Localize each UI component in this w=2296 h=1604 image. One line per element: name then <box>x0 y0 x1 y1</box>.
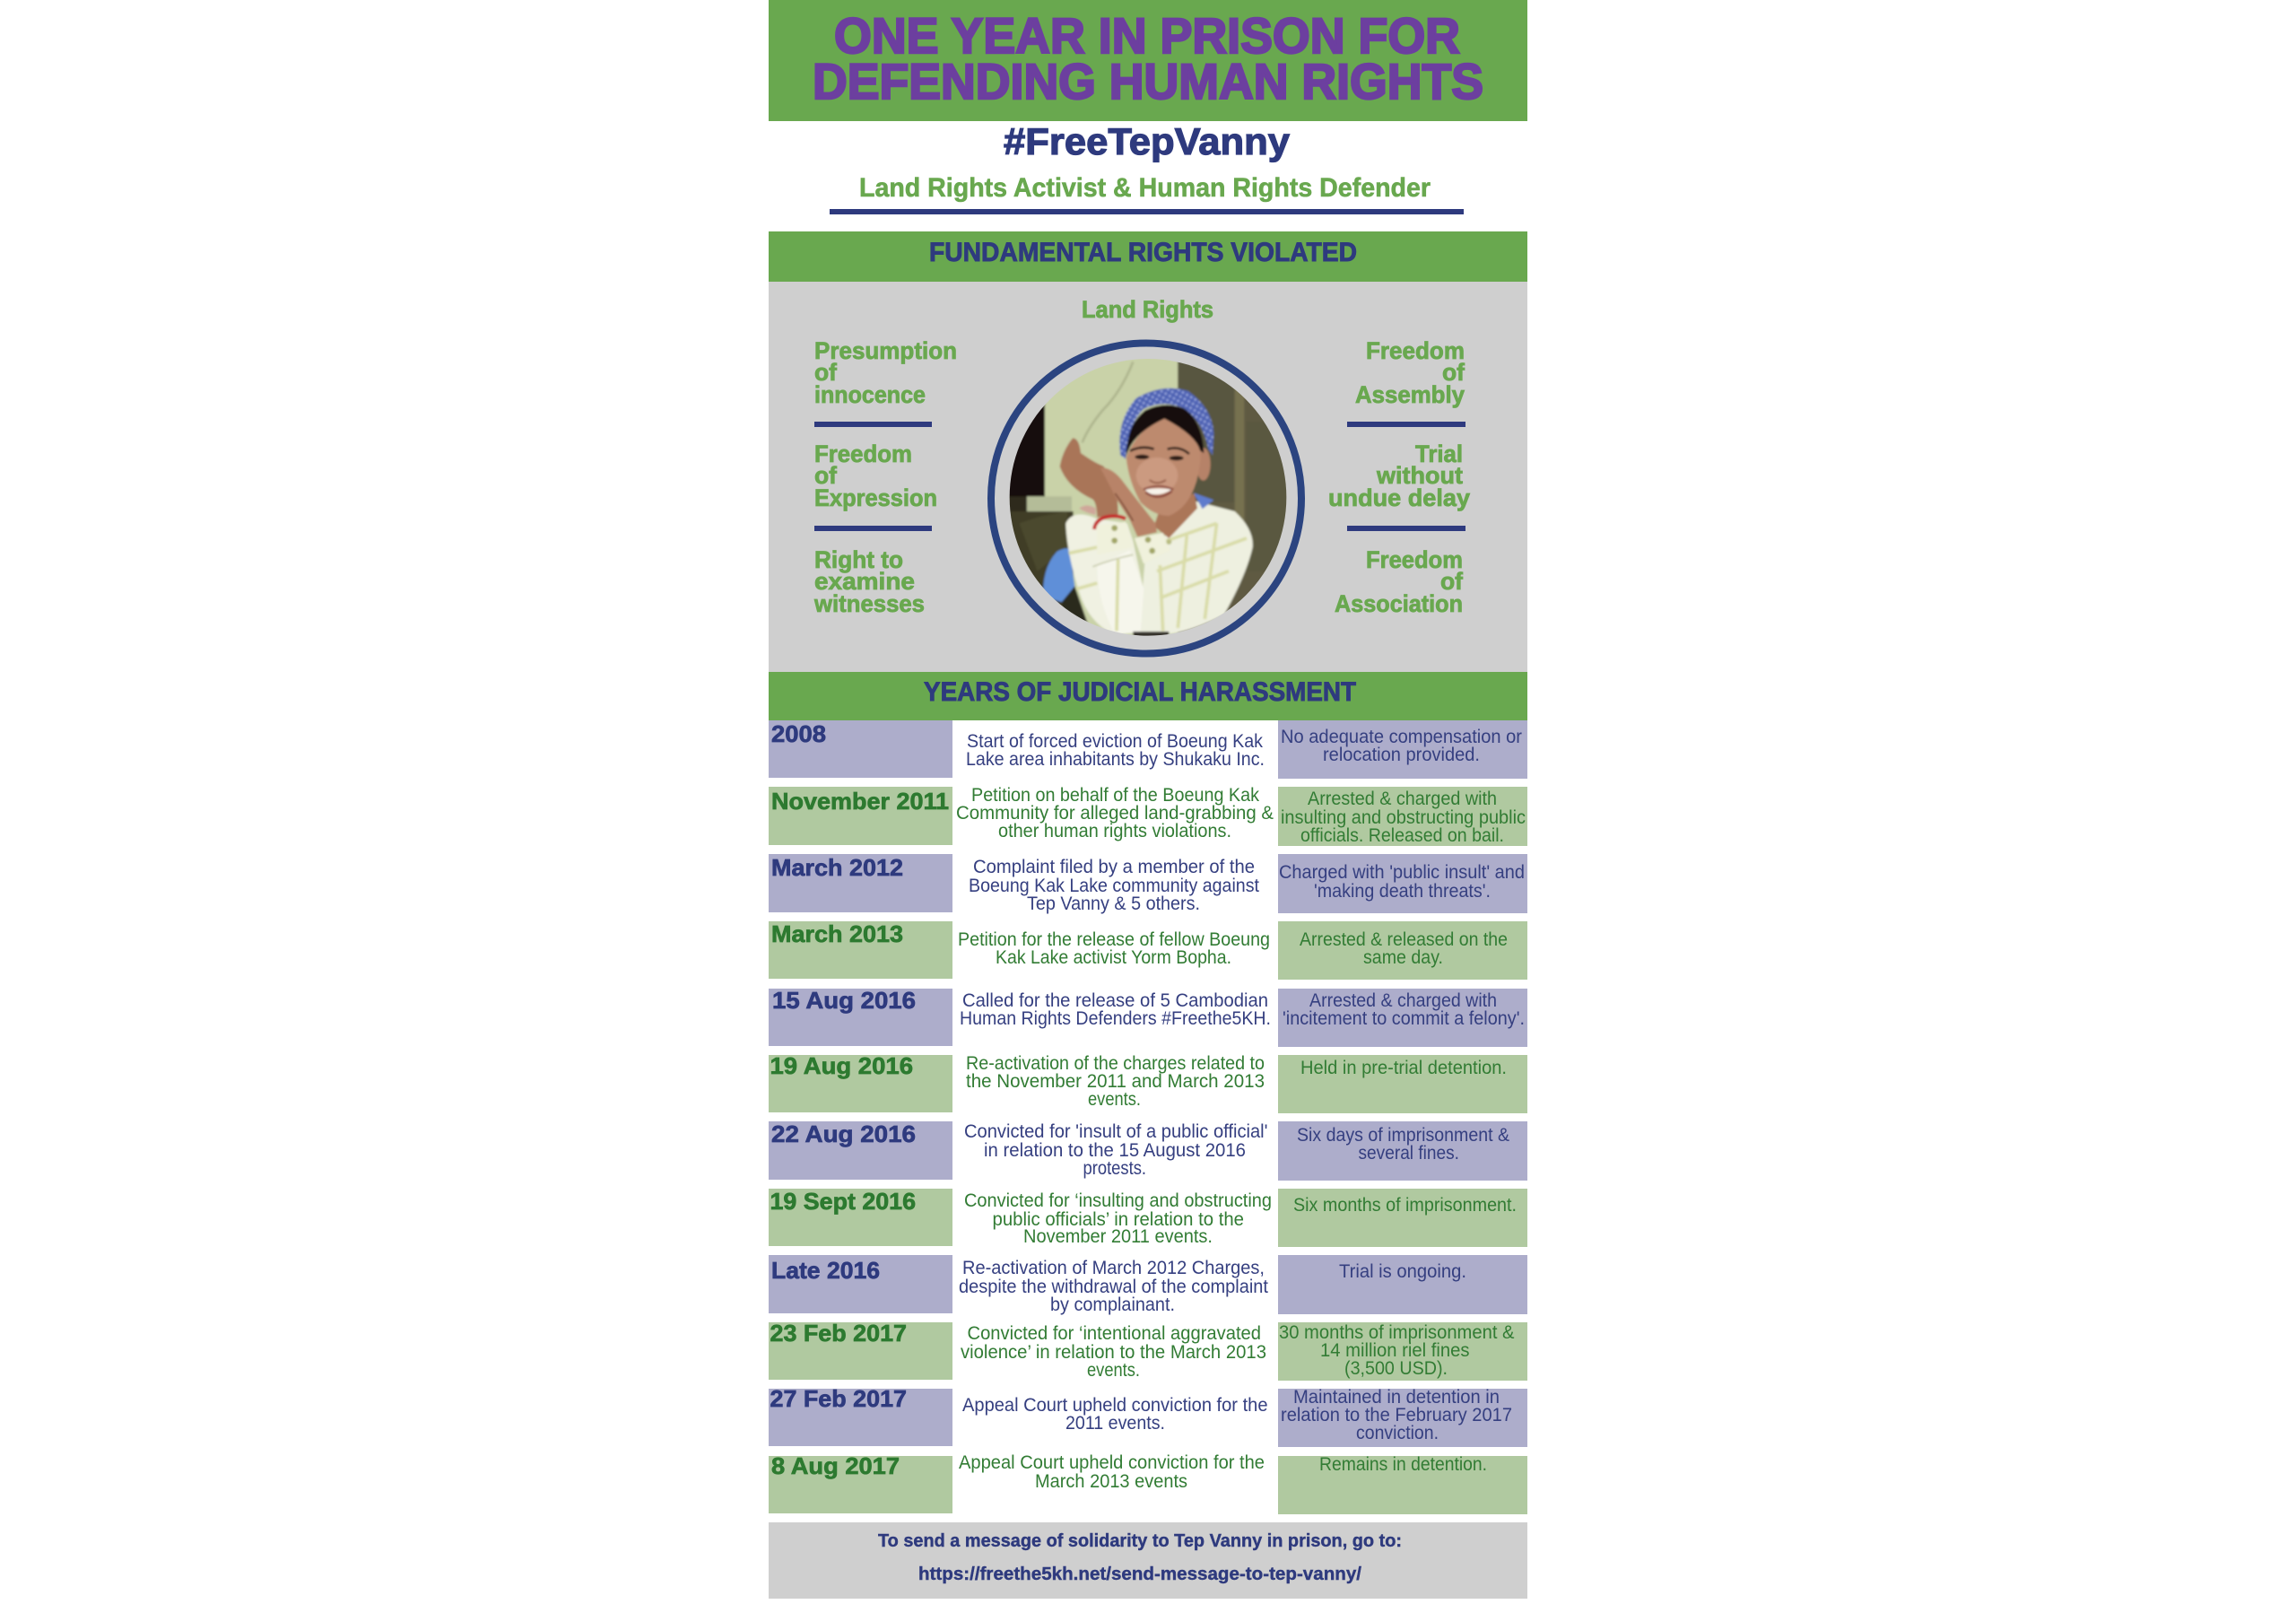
row: November 2011: Community for alleged land-grabbing & <box>956 803 1274 824</box>
row: Late 2016: Late 2016 <box>771 1257 880 1284</box>
footer call to action: https://freethe5kh.net/send-message-to-tep-vanny/ <box>918 1565 1361 1584</box>
label: freedom of assembly: Assembly <box>1355 381 1465 408</box>
row: 15 Aug 2016: 'incitement to commit a felony'. <box>1283 1008 1525 1029</box>
row: 15 Aug 2016: Called for the release of 5 Cambodian <box>962 990 1268 1011</box>
row: Late 2016 <box>769 1255 1527 1315</box>
heading: years of judicial harassment: YEARS OF JUDICIAL HARASSMENT <box>924 677 1356 707</box>
row: 23 Feb 2017: events. <box>1087 1360 1140 1381</box>
row: 23 Feb 2017: 30 months of imprisonment & <box>1279 1322 1514 1343</box>
row: 8 Aug 2017: Remains in detention. <box>1319 1454 1487 1475</box>
row: November 2011: officials. Released on bail. <box>1300 825 1504 846</box>
row: 2008: 2008 <box>771 720 826 747</box>
row: 23 Feb 2017: 23 Feb 2017 <box>770 1320 907 1347</box>
label: presumption of innocence <box>814 337 957 408</box>
row: 19 Sept 2016: November 2011 events. <box>1023 1226 1213 1247</box>
label: right to examine witnesses: Right to <box>814 546 903 573</box>
label: freedom of association: of <box>1440 568 1464 595</box>
row: March 2013 <box>769 920 1527 980</box>
label: freedom of assembly <box>1355 337 1465 408</box>
portrait photo of Tep Vanny <box>1004 353 1292 643</box>
label: freedom of expression: Freedom <box>814 440 912 467</box>
hashtag: #FreeTepVanny <box>1004 120 1291 162</box>
raised hand <box>1060 438 1118 518</box>
row: 27 Feb 2017: 27 Feb 2017 <box>770 1385 907 1412</box>
footer call to action: To send a message of solidarity to Tep Vanny in prison, go to: <box>878 1531 1402 1551</box>
row: March 2012: Tep Vanny & 5 others. <box>1027 894 1200 914</box>
row: 22 Aug 2016: Six days of imprisonment & <box>1297 1125 1509 1146</box>
row: 23 Feb 2017: violence’ in relation to the March 2013 <box>961 1342 1266 1363</box>
headband <box>1119 388 1213 459</box>
row: 19 Sept 2016: public officials’ in relation to the <box>992 1209 1244 1230</box>
row: March 2013: Petition for the release of fellow Boeung <box>958 929 1270 950</box>
row: 15 Aug 2016: Arrested & charged with <box>1309 990 1497 1011</box>
label: presumption of innocence: of <box>814 359 838 386</box>
chair <box>1043 548 1074 603</box>
row: March 2013: Kak Lake activist Yorm Bopha. <box>996 947 1231 968</box>
row: 19 Aug 2016: the November 2011 and March 2013 <box>966 1071 1265 1092</box>
row: 22 Aug 2016: in relation to the 15 August 2016 <box>984 1140 1246 1161</box>
row: 27 Feb 2017: 2011 events. <box>1065 1413 1165 1434</box>
label: right to examine witnesses: examine <box>814 568 915 595</box>
row: 8 Aug 2017: Appeal Court upheld conviction for the <box>959 1452 1265 1473</box>
row: November 2011 <box>769 785 1527 846</box>
row: 19 Sept 2016: 19 Sept 2016 <box>770 1188 916 1215</box>
row: 22 Aug 2016 <box>769 1120 1527 1181</box>
hair <box>1125 405 1204 459</box>
row: 8 Aug 2017: 8 Aug 2017 <box>771 1452 900 1479</box>
row: 19 Sept 2016 <box>769 1188 1527 1247</box>
row: 19 Sept 2016: Convicted for ‘insulting and obstructing <box>964 1190 1272 1211</box>
label: trial without undue delay: Trial <box>1415 440 1463 467</box>
row: 27 Feb 2017: conviction. <box>1356 1423 1439 1443</box>
label: freedom of expression <box>814 440 937 511</box>
row: March 2012: Charged with 'public insult' and <box>1279 862 1525 883</box>
row: 27 Feb 2017: Maintained in detention in <box>1293 1387 1500 1408</box>
subtitle: Land Rights Activist & Human Rights Defender <box>859 173 1431 203</box>
row: 2008: No adequate compensation or <box>1281 727 1522 747</box>
row: Late 2016: Re-activation of March 2012 Charges, <box>962 1258 1265 1278</box>
row: March 2012: Complaint filed by a member of the <box>973 857 1255 877</box>
sleeve <box>1065 515 1144 634</box>
row: 15 Aug 2016: 15 Aug 2016 <box>772 987 916 1014</box>
heading: years of judicial harassment <box>769 672 1527 720</box>
label: presumption of innocence: Presumption <box>814 337 957 364</box>
row: 19 Aug 2016: 19 Aug 2016 <box>770 1052 913 1079</box>
row: 23 Feb 2017 <box>769 1320 1527 1381</box>
brows <box>1130 448 1154 451</box>
row: 22 Aug 2016: 22 Aug 2016 <box>771 1120 916 1147</box>
row: March 2013: March 2013 <box>771 920 903 947</box>
row: 19 Aug 2016: Held in pre-trial detention. <box>1300 1058 1507 1078</box>
row: 22 Aug 2016: protests. <box>1083 1158 1146 1179</box>
row: 19 Aug 2016 <box>769 1052 1527 1113</box>
label: freedom of expression: of <box>814 462 838 489</box>
row: 2008: relocation provided. <box>1323 745 1480 765</box>
label: trial without undue delay: undue delay <box>1328 484 1470 511</box>
label: trial without undue delay: without <box>1376 462 1463 489</box>
row: 8 Aug 2017: March 2013 events <box>1035 1471 1187 1492</box>
row: 22 Aug 2016: Convicted for 'insult of a public official' <box>964 1121 1268 1142</box>
row: November 2011: Petition on behalf of the Boeung Kak <box>971 785 1259 806</box>
row: 19 Aug 2016: Re-activation of the charges related to <box>966 1053 1265 1074</box>
title banner: DEFENDING HUMAN RIGHTS <box>813 53 1483 109</box>
row: 8 Aug 2017 <box>769 1452 1527 1514</box>
label: freedom of expression: Expression <box>814 484 937 511</box>
row: March 2013: Arrested & released on the <box>1300 929 1508 950</box>
eyes <box>1135 455 1149 459</box>
row: March 2013: same day. <box>1363 947 1443 968</box>
row: March 2012: March 2012 <box>771 854 903 881</box>
row: March 2012: Boeung Kak Lake community against <box>969 876 1259 896</box>
row: 27 Feb 2017: relation to the February 2017 <box>1281 1405 1512 1425</box>
mouth <box>1145 488 1172 494</box>
title banner: ONE YEAR IN PRISON FOR <box>834 7 1460 64</box>
timeline table <box>769 720 1527 1514</box>
nose <box>1150 480 1166 483</box>
second hand <box>1100 468 1157 536</box>
row: 2008 <box>769 720 1527 779</box>
face <box>1126 417 1201 516</box>
row: Late 2016: despite the withdrawal of the complaint <box>959 1277 1268 1297</box>
row: March 2012: 'making death threats'. <box>1314 881 1491 902</box>
label: right to examine witnesses: witnesses <box>813 590 925 617</box>
row: 27 Feb 2017 <box>769 1385 1527 1447</box>
shirt body <box>1139 501 1253 634</box>
heading: fundamental rights violated: FUNDAMENTAL RIGHTS VIOLATED <box>929 238 1357 267</box>
label: right to examine witnesses <box>813 546 925 617</box>
title banner <box>769 0 1527 121</box>
label: presumption of innocence: innocence <box>814 381 926 408</box>
label: freedom of association: Association <box>1335 590 1463 617</box>
heading: fundamental rights violated <box>769 231 1527 282</box>
panel: rights violated <box>769 282 1527 672</box>
neck <box>1154 493 1197 538</box>
row: 15 Aug 2016 <box>769 987 1527 1047</box>
row: March 2012 <box>769 854 1527 914</box>
row: 23 Feb 2017: 14 million riel fines <box>1320 1340 1469 1361</box>
label: freedom of assembly: of <box>1442 359 1465 386</box>
cuffs <box>1095 521 1126 527</box>
row: November 2011: other human rights violations. <box>998 821 1231 841</box>
row: Late 2016: by complainant. <box>1050 1295 1175 1315</box>
label: freedom of association: Freedom <box>1366 546 1463 573</box>
label: freedom of association <box>1335 546 1464 617</box>
row: 27 Feb 2017: Appeal Court upheld conviction for the <box>962 1395 1268 1416</box>
row: 2008: Lake area inhabitants by Shukaku Inc. <box>966 749 1265 770</box>
footer call to action <box>769 1522 1527 1599</box>
label: freedom of assembly: Freedom <box>1366 337 1465 364</box>
row: 19 Aug 2016: events. <box>1088 1089 1141 1110</box>
row: November 2011: November 2011 <box>771 788 949 815</box>
row: November 2011: insulting and obstructing public <box>1281 807 1526 828</box>
row: 2008: Start of forced eviction of Boeung Kak <box>967 731 1263 752</box>
row: November 2011: Arrested & charged with <box>1308 789 1497 809</box>
row: 23 Feb 2017: (3,500 USD). <box>1344 1358 1448 1379</box>
row: 15 Aug 2016: Human Rights Defenders #Freethe5KH. <box>960 1008 1271 1029</box>
label: land rights: Land Rights <box>1082 296 1213 323</box>
row: 22 Aug 2016: several fines. <box>1358 1143 1459 1164</box>
ring around portrait <box>991 343 1301 653</box>
row: 23 Feb 2017: Convicted for ‘intentional aggravated <box>967 1323 1261 1344</box>
bracelet <box>1094 516 1126 529</box>
ear <box>1196 448 1211 481</box>
label: trial without undue delay <box>1328 440 1470 511</box>
row: 19 Sept 2016: Six months of imprisonment. <box>1293 1195 1517 1216</box>
row: Late 2016: Trial is ongoing. <box>1339 1261 1466 1282</box>
